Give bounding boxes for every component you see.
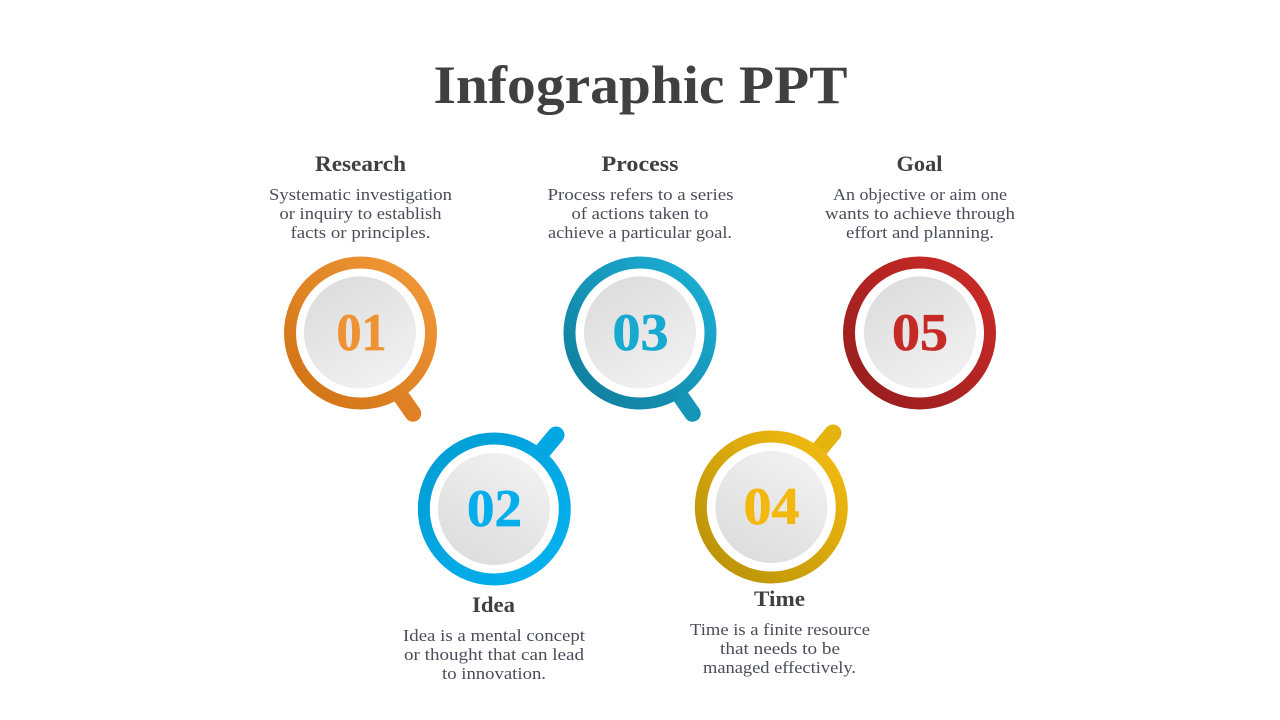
text block: goal description: wants to achieve through: [825, 204, 1016, 223]
heading: research: Research: [315, 151, 406, 176]
icon: blue magnifier badge 02: 02: [467, 480, 522, 538]
icon: red badge 05: 05: [892, 304, 948, 362]
text block: idea description: to innovation.: [442, 664, 546, 683]
panel: 02 idea: [403, 435, 585, 683]
icon: teal magnifier badge 03: [570, 262, 710, 414]
text block: goal description: effort and planning.: [846, 223, 994, 242]
text block: time description: [690, 620, 870, 677]
text block: process description: Process refers to a series: [548, 185, 734, 204]
text block: goal description: An objective or aim one: [833, 185, 1007, 204]
text block: idea description: [403, 626, 585, 683]
heading: goal: Goal: [896, 151, 942, 176]
text block: process description: achieve a particular goal.: [548, 223, 732, 242]
heading: process: Process: [602, 151, 679, 176]
icon: orange magnifier badge 01: 01: [336, 304, 386, 362]
icon: teal magnifier badge 03: 03: [612, 304, 668, 362]
text block: goal description: [825, 185, 1016, 242]
panel: 04 time: [690, 433, 870, 677]
icon: blue magnifier badge 02: [424, 435, 565, 580]
panel: 01 research: [269, 151, 453, 414]
text block: time description: managed effectively.: [703, 658, 856, 677]
icon: red badge 05: [849, 262, 990, 404]
text block: research description: [269, 185, 453, 242]
text block: time description: that needs to be: [720, 639, 840, 658]
text block: idea description: Idea is a mental concept: [403, 626, 585, 645]
text block: time description: Time is a finite resource: [690, 620, 870, 639]
heading: idea: Idea: [472, 592, 515, 617]
panel: 05 goal: [825, 151, 1016, 404]
text block: idea description: or thought that can lead: [404, 645, 585, 664]
text block: research description: facts or principles.: [290, 223, 430, 242]
icon: yellow magnifier badge 04: [701, 433, 842, 578]
icon: orange magnifier badge 01: [290, 262, 431, 414]
title: Infographic PPT: [434, 55, 848, 115]
text block: process description: of actions taken to: [572, 204, 708, 223]
panel: 03 process: [548, 151, 734, 414]
heading: time: Time: [754, 586, 805, 611]
text block: process description: [548, 185, 734, 242]
icon: yellow magnifier badge 04: 04: [744, 478, 800, 536]
text block: research description: or inquiry to establish: [280, 204, 442, 223]
text block: research description: Systematic investigation: [269, 185, 453, 204]
